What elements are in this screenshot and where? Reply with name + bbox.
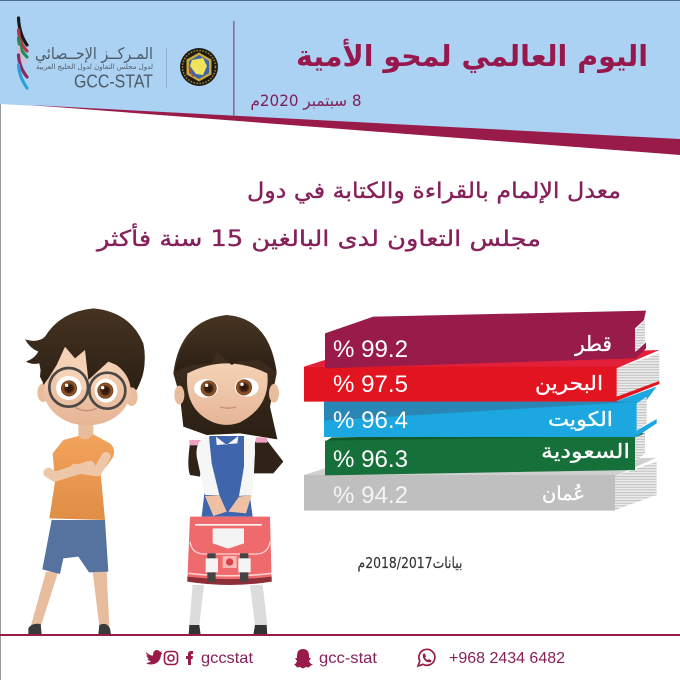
text: gcc-stat: gcc-stat <box>319 650 378 667</box>
book: Qatar: قطر <box>574 332 612 356</box>
book: Bahrain: البحرين <box>535 371 603 395</box>
book: Oman: % 94.2 <box>333 482 408 509</box>
book: Oman: عُمان <box>542 483 585 505</box>
girl eyes <box>194 378 259 398</box>
icon: flag swoosh <box>18 18 27 88</box>
girl ears <box>174 384 279 404</box>
text: gccstat: gccstat <box>201 650 254 667</box>
boy back hair <box>40 309 145 390</box>
logo subtitle arabic: لدول مجلس التعاون لدول الخليج العربية <box>36 63 153 71</box>
book: Bahrain <box>304 350 659 402</box>
footer line <box>0 634 680 636</box>
book: Kuwait: % 96.4 <box>333 407 408 434</box>
logo text arabic: المـركــز الإحــصائي <box>35 44 153 64</box>
boy shoes <box>28 624 111 634</box>
chart: book stack <box>304 311 659 511</box>
girl face <box>187 363 268 425</box>
book: Qatar: % 99.2 <box>333 336 408 363</box>
boy shorts <box>42 520 108 574</box>
book: Bahrain: % 97.5 <box>333 371 408 398</box>
book: Kuwait <box>324 387 657 437</box>
logo text GCC-STAT: GCC-STAT <box>74 72 153 92</box>
girl backpack <box>187 517 272 585</box>
boy eyes <box>56 376 117 403</box>
book: Saudi Arabia: السعودية <box>541 439 630 463</box>
date: 8 سبتمبر 2020م <box>250 91 362 111</box>
girl mouth <box>220 407 236 408</box>
boy shirt <box>49 434 114 520</box>
girl legs <box>189 585 267 625</box>
boy mouth <box>75 407 97 411</box>
book: Oman <box>304 458 657 511</box>
character: boy <box>25 308 145 634</box>
book: Saudi Arabia: % 96.3 <box>333 446 408 473</box>
heading: literacy rate <box>96 179 621 252</box>
icon: twitter <box>146 650 162 664</box>
boy legs <box>31 572 109 627</box>
boy neck <box>78 420 93 442</box>
girl dress <box>202 436 253 517</box>
boy arms <box>48 457 106 477</box>
icon: whatsapp <box>418 649 435 666</box>
text: phone: +968 2434 6482 <box>449 650 565 667</box>
boy glasses <box>49 368 125 409</box>
boy ears <box>37 383 138 406</box>
girl hands <box>205 495 252 516</box>
boy face <box>44 343 131 425</box>
icon: facebook <box>186 651 193 665</box>
logo: GCC-STAT <box>18 18 218 92</box>
icon: snapchat <box>294 649 313 668</box>
book: Saudi Arabia <box>325 432 645 475</box>
header band <box>0 0 680 155</box>
footer: social contacts <box>146 649 565 668</box>
heading line 2: مجلس التعاون لدى البالغين 15 سنة فأكثر <box>96 223 541 252</box>
book: Kuwait: الكويت <box>548 407 613 431</box>
boy hair <box>25 308 145 390</box>
title: اليوم العالمي لمحو الأمية <box>296 38 648 73</box>
character: girl <box>173 315 283 635</box>
icon: GCC seal <box>180 48 218 86</box>
data note: بيانات2018/2017م <box>358 554 462 572</box>
girl pigtails <box>188 437 283 477</box>
icon: instagram <box>164 652 178 664</box>
heading line 1: معدل الإلمام بالقراءة والكتابة في دول <box>247 179 621 204</box>
book: Qatar <box>325 311 646 368</box>
girl shoes <box>189 625 267 635</box>
girl bangs <box>175 318 277 372</box>
girl hair back <box>173 315 277 439</box>
girl sleeves <box>196 436 255 496</box>
